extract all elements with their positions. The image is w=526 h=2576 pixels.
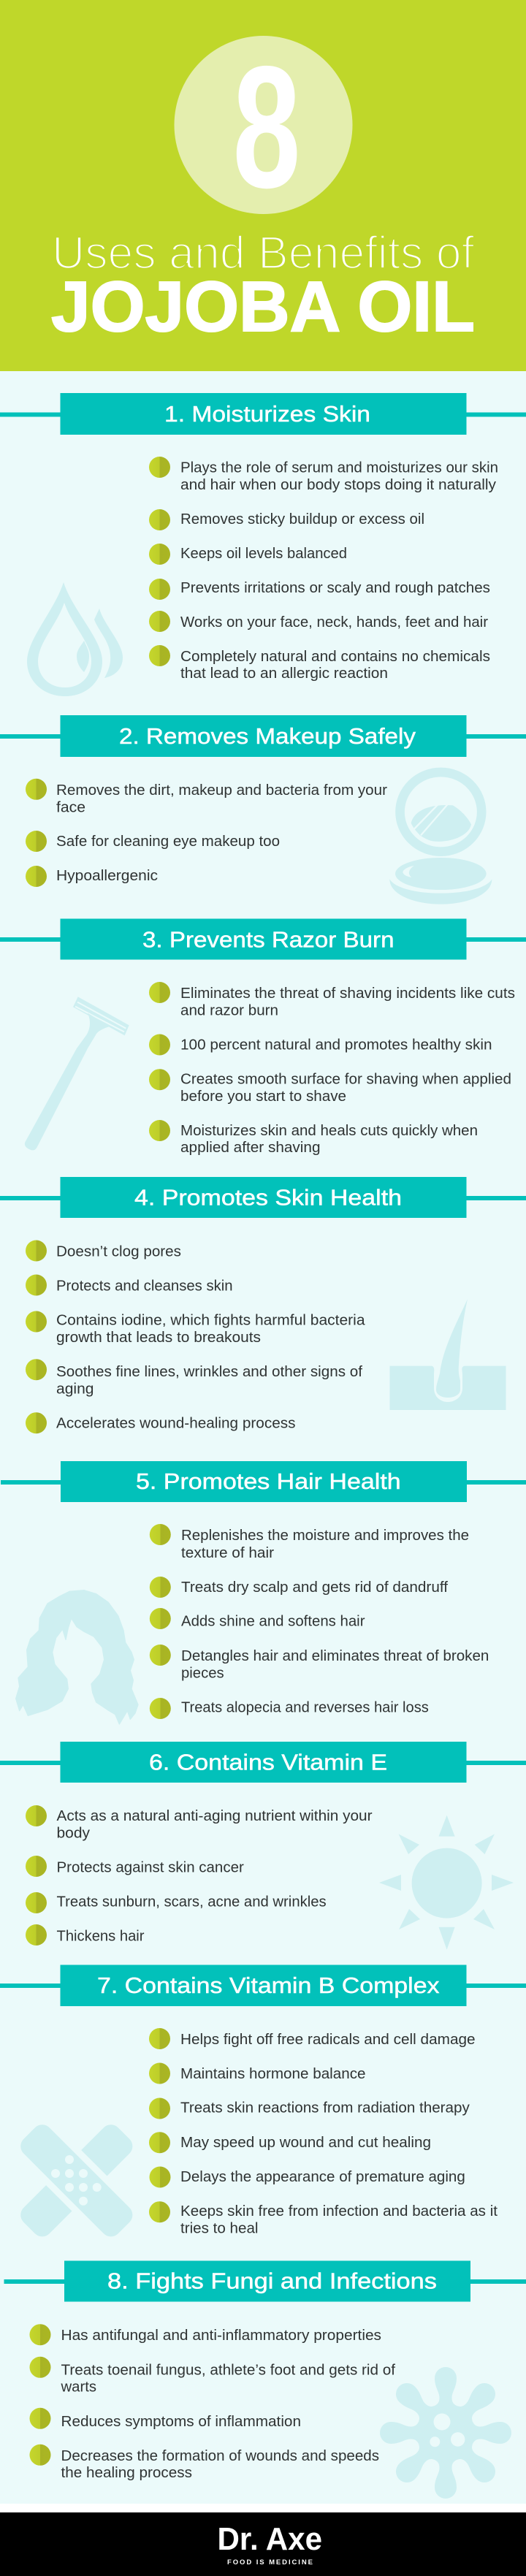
list item: tries to heal: [180, 2221, 259, 2237]
list item: Decreases the formation of wounds and speeds: [61, 2448, 379, 2464]
logo wordmark: Dr. Axe: [218, 2521, 322, 2557]
list item: [150, 1698, 429, 1719]
list item: [29, 2324, 381, 2345]
list item: Replenishes the moisture and improves the: [181, 1528, 469, 1544]
icon: sun: [379, 1815, 514, 1950]
list item: the healing process: [61, 2465, 192, 2481]
list item: [26, 1241, 181, 1261]
list item: Completely natural and contains no chemicals: [180, 649, 490, 665]
heading banner 3: [0, 919, 526, 960]
heading banner 1: 1. Moisturizes Skin: [164, 401, 370, 427]
list item: [26, 1412, 295, 1433]
list item: growth that leads to breakouts: [56, 1330, 261, 1346]
list item: [149, 2201, 498, 2237]
list item: [149, 2167, 465, 2187]
icon: makeup compact: [389, 772, 492, 904]
big number 8: 8: [232, 31, 301, 224]
heading banner 7: 7. Contains Vitamin B Complex: [97, 1973, 440, 1998]
list item: [26, 1274, 233, 1296]
list item: [149, 2063, 365, 2084]
list item: Protects against skin cancer: [57, 1860, 244, 1876]
panel: 5. Promotes Hair Health: [1, 1461, 526, 1724]
list item: [149, 982, 515, 1018]
list item: before you start to shave: [180, 1089, 346, 1105]
list item: [26, 1311, 365, 1346]
list item: Treats sunburn, scars, acne and wrinkles: [57, 1894, 327, 1910]
list item: Removes the dirt, makeup and bacteria from your: [56, 782, 387, 799]
list item: Delays the appearance of premature aging: [180, 2169, 465, 2185]
list item: [26, 831, 280, 852]
list item: Helps fight off free radicals and cell damage: [180, 2032, 476, 2048]
icon: hair follicle: [390, 1299, 506, 1410]
list item: Treats alopecia and reverses hair loss: [181, 1699, 429, 1715]
list item: face: [56, 799, 85, 815]
list item: Protects and cleanses skin: [56, 1279, 233, 1295]
list item: Plays the role of serum and moisturizes our skin: [180, 460, 498, 476]
icon: crossed bandages: [16, 2120, 137, 2241]
list item: Safe for cleaning eye makeup too: [56, 834, 280, 850]
list item: and razor burn: [180, 1002, 278, 1018]
list item: [26, 1892, 327, 1913]
list item: Adds shine and softens hair: [181, 1614, 365, 1630]
list item: [29, 2408, 301, 2430]
main title: JOJOBA OIL: [51, 267, 475, 346]
list item: [26, 1924, 145, 1946]
heading banner 4: 4. Promotes Skin Health: [134, 1184, 402, 1210]
panel: 4. Promotes Skin Health: [0, 1177, 526, 1433]
list item: Accelerates wound-healing process: [56, 1416, 295, 1432]
list item: [149, 579, 490, 600]
list item: Hypoallergenic: [56, 868, 158, 884]
list item: warts: [60, 2379, 96, 2396]
heading banner 5: [1, 1461, 526, 1502]
list item: [26, 866, 158, 887]
panel: 8. Fights Fungi and Infections: [4, 2260, 526, 2499]
list item: [149, 544, 347, 565]
list item: Reduces symptoms of inflammation: [61, 2414, 301, 2430]
number circle: [174, 36, 352, 214]
list item: Has antifungal and anti-inflammatory properties: [61, 2328, 381, 2344]
list item: and hair when our body stops doing it naturally: [180, 477, 496, 493]
list item: Works on your face, neck, hands, feet and hair: [180, 614, 488, 630]
heading banner 8: 8. Fights Fungi and Infections: [107, 2268, 437, 2293]
list item: [150, 1608, 365, 1630]
list item: [149, 1069, 511, 1105]
subtitle: Uses and Benefits of: [52, 228, 474, 279]
icon: razor: [25, 997, 129, 1150]
list item: Maintains hormone balance: [180, 2066, 365, 2082]
list item: [29, 2357, 395, 2396]
list item: Treats dry scalp and gets rid of dandruff: [181, 1579, 448, 1596]
list item: [149, 645, 490, 682]
logo tagline: FOOD IS MEDICINE: [227, 2558, 313, 2567]
list item: Keeps skin free from infection and bacteria as it: [180, 2203, 498, 2219]
list item: [149, 1034, 492, 1055]
icon: virus: [380, 2367, 511, 2499]
list item: [149, 2028, 476, 2049]
list item: Keeps oil levels balanced: [180, 546, 347, 562]
icon: hair silhouette: [16, 1590, 138, 1724]
heading banner 2: [0, 715, 526, 757]
heading banner 8: [4, 2260, 526, 2301]
list item: Soothes fine lines, wrinkles and other signs of: [56, 1364, 362, 1380]
list item: Creates smooth surface for shaving when applied: [180, 1072, 511, 1088]
list item: [26, 1359, 362, 1398]
list item: [26, 1856, 244, 1877]
footer: Dr. Axe logo bar: [0, 2512, 526, 2576]
panel: 2. Removes Makeup Safely: [0, 715, 526, 904]
list item: [26, 1805, 373, 1841]
list item: [150, 1645, 489, 1682]
heading banner 6: 6. Contains Vitamin E: [149, 1750, 387, 1775]
list item: aging: [56, 1382, 94, 1398]
list item: Treats skin reactions from radiation therapy: [180, 2100, 470, 2116]
panel: title header: [0, 0, 526, 371]
list item: Thickens hair: [57, 1929, 145, 1945]
panel: 3. Prevents Razor Burn: [0, 919, 526, 1156]
list item: body: [57, 1825, 90, 1841]
list item: [149, 2098, 470, 2119]
list item: Prevents irritations or scaly and rough patches: [180, 580, 490, 596]
list item: [150, 1577, 448, 1598]
list item: [149, 2132, 431, 2153]
list item: 100 percent natural and promotes healthy skin: [180, 1037, 492, 1053]
heading banner 5: 5. Promotes Hair Health: [136, 1468, 401, 1494]
list item: pieces: [181, 1666, 224, 1682]
list item: [26, 779, 387, 815]
list item: Doesn’t clog pores: [56, 1243, 181, 1260]
list item: Removes sticky buildup or excess oil: [180, 511, 424, 527]
list item: texture of hair: [181, 1545, 274, 1561]
icon: water drops: [27, 582, 123, 696]
heading banner 3: 3. Prevents Razor Burn: [142, 927, 394, 953]
heading banner 6: [0, 1742, 526, 1783]
panel: 1. Moisturizes Skin: [0, 393, 526, 696]
list item: applied after shaving: [180, 1140, 320, 1156]
list item: Acts as a natural anti-aging nutrient within your: [57, 1808, 373, 1824]
list item: [149, 509, 424, 530]
heading banner 7: [0, 1965, 526, 2006]
panel: 6. Contains Vitamin E: [0, 1742, 526, 1950]
list item: [149, 457, 498, 493]
list item: [149, 1120, 478, 1156]
panel: 7. Contains Vitamin B Complex: [0, 1965, 526, 2241]
list item: Treats toenail fungus, athlete’s foot and gets rid of: [61, 2363, 395, 2379]
list item: Moisturizes skin and heals cuts quickly when: [180, 1123, 478, 1139]
list item: [150, 1524, 469, 1561]
heading banner 4: [0, 1177, 526, 1218]
list item: that lead to an allergic reaction: [180, 666, 388, 682]
heading banner 1: [0, 393, 526, 435]
list item: Detangles hair and eliminates threat of broken: [181, 1648, 489, 1664]
list item: May speed up wound and cut healing: [180, 2135, 431, 2151]
list item: [29, 2444, 379, 2481]
list item: Contains iodine, which fights harmful bacteria: [56, 1312, 365, 1328]
heading banner 2: 2. Removes Makeup Safely: [119, 723, 416, 749]
list item: [149, 611, 488, 632]
list item: Eliminates the threat of shaving incidents like cuts: [180, 986, 515, 1002]
